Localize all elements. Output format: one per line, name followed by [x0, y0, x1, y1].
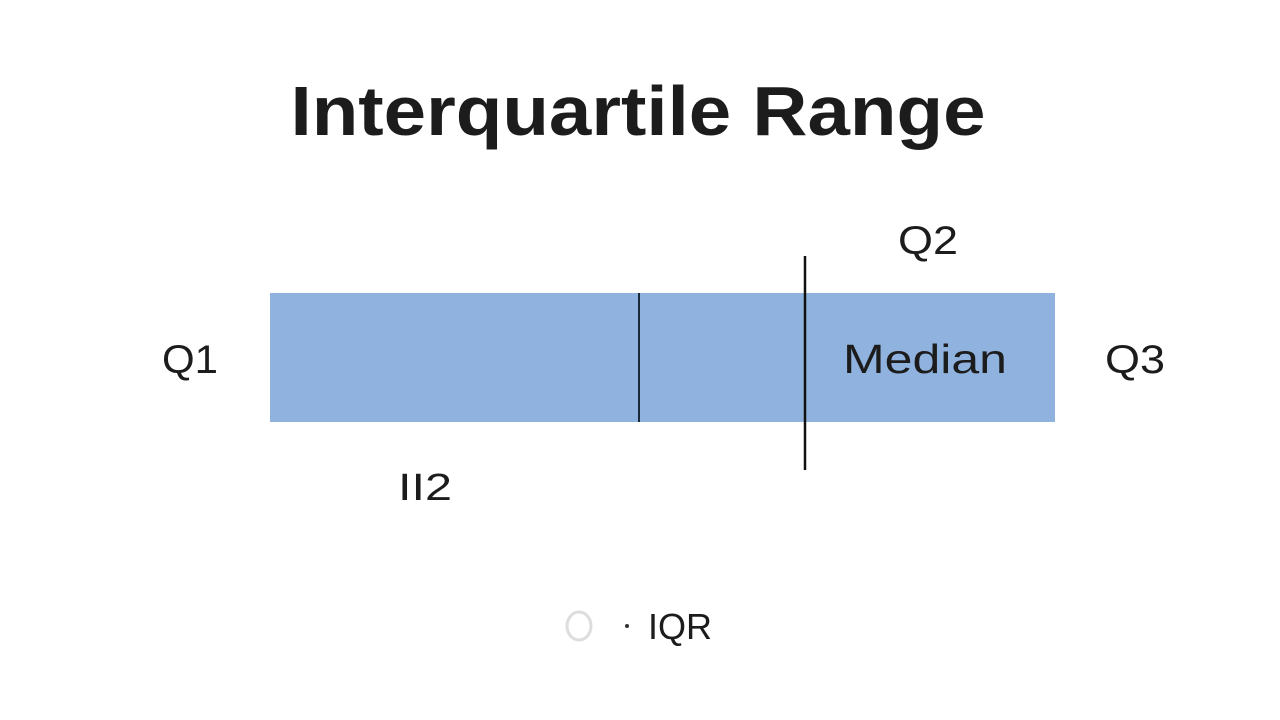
label: II2: II2	[398, 467, 452, 509]
legend dot	[625, 624, 629, 628]
box: interquartile bar	[270, 293, 1055, 422]
legend	[567, 606, 712, 647]
legend icon: circle	[567, 612, 591, 640]
label: Median: Median	[843, 336, 1007, 382]
label: Q3: Q3	[1105, 338, 1165, 382]
title: Interquartile Range	[290, 72, 985, 150]
median line	[804, 256, 806, 470]
legend label: IQR: IQR	[648, 606, 712, 647]
label: Q2: Q2	[898, 219, 958, 263]
label: Q1: Q1	[162, 338, 218, 382]
inner divider line	[638, 293, 640, 422]
